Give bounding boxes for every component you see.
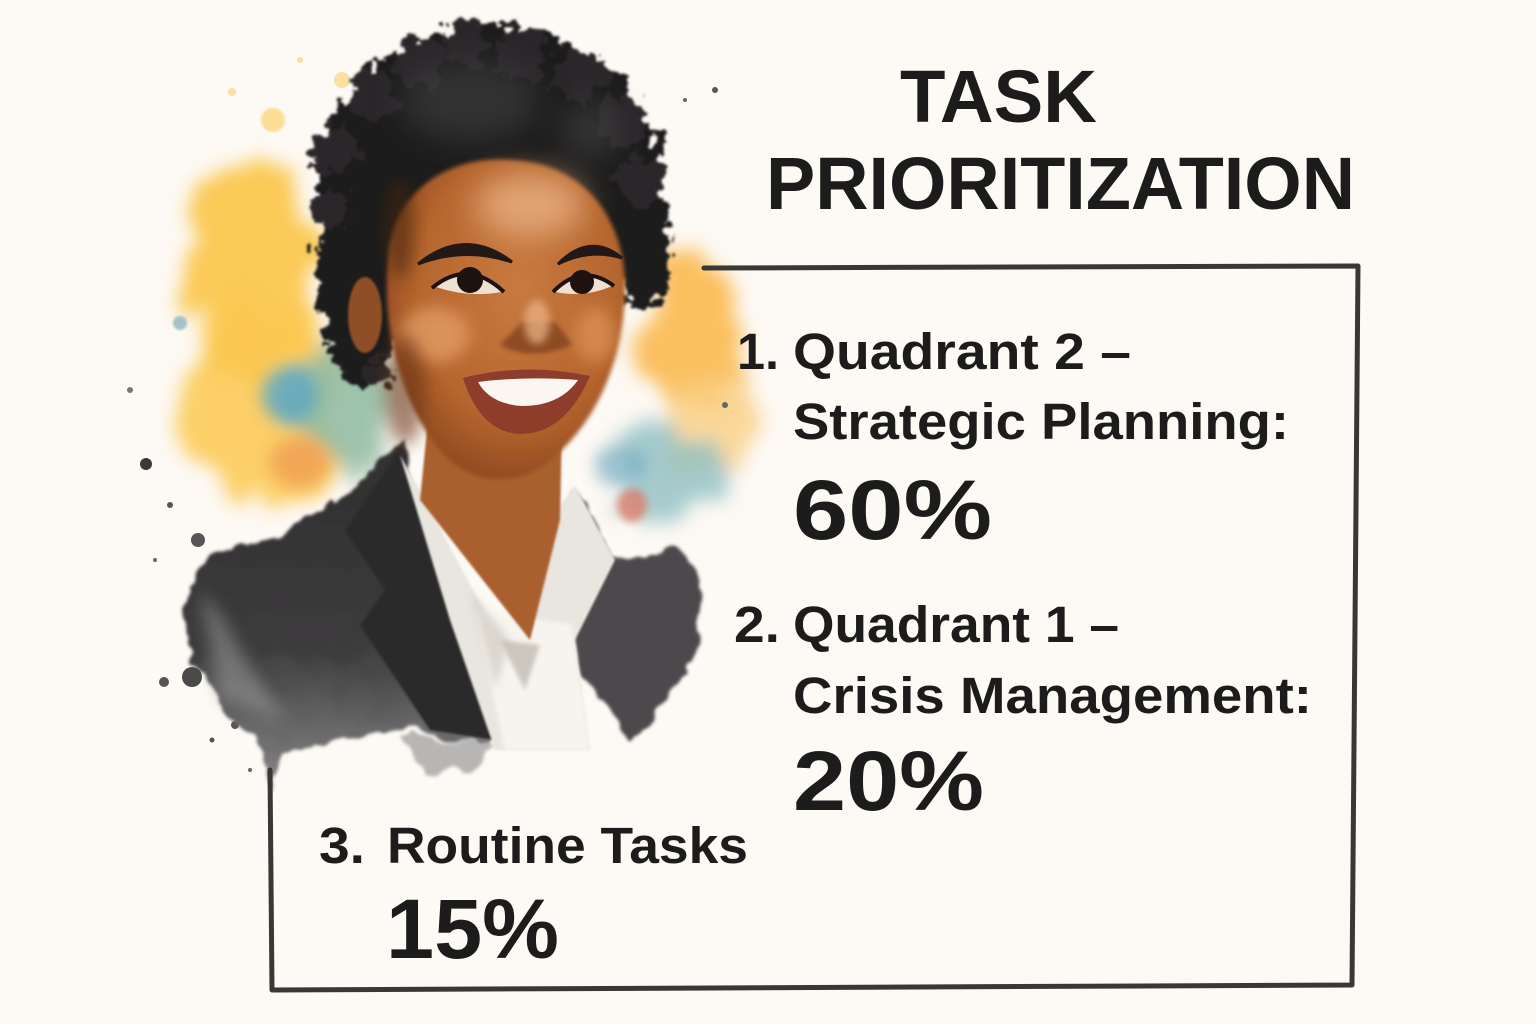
item 1: Quadrant 2: Quadrant 2 – [793, 323, 1131, 380]
nose [500, 322, 572, 354]
item 2: Quadrant 1: Quadrant 1 – [793, 596, 1119, 653]
item 2: Quadrant 1: 20% [793, 734, 984, 828]
item 3: Routine Tasks [319, 817, 748, 976]
title: PRIORITIZATION [766, 142, 1355, 225]
face [348, 160, 625, 479]
item 1: Quadrant 2: 1. [737, 323, 779, 380]
item 2: Quadrant 1 [734, 596, 1312, 828]
title: TASK [900, 55, 1097, 138]
jacket [183, 440, 703, 790]
item 1: Quadrant 2 [737, 323, 1289, 557]
eyes [436, 276, 502, 294]
item 1: Quadrant 2: 60% [793, 463, 992, 557]
drawn frame [270, 266, 1358, 990]
title [766, 55, 1355, 225]
shirt [400, 455, 615, 750]
hair [308, 20, 670, 388]
neck [420, 420, 562, 640]
item 2: Quadrant 1: 2. [734, 596, 780, 653]
item 1: Quadrant 2: Strategic Planning: [793, 393, 1289, 450]
item 3: Routine Tasks: 15% [386, 882, 559, 976]
item 2: Quadrant 1: Crisis Management: [793, 667, 1312, 724]
item 3: Routine Tasks: 3. [319, 817, 365, 874]
eyebrows [418, 244, 512, 264]
portrait illustration [183, 20, 703, 790]
watercolor splash behind portrait [127, 57, 742, 772]
item 3: Routine Tasks: Routine Tasks [387, 817, 748, 874]
mouth [463, 369, 590, 434]
